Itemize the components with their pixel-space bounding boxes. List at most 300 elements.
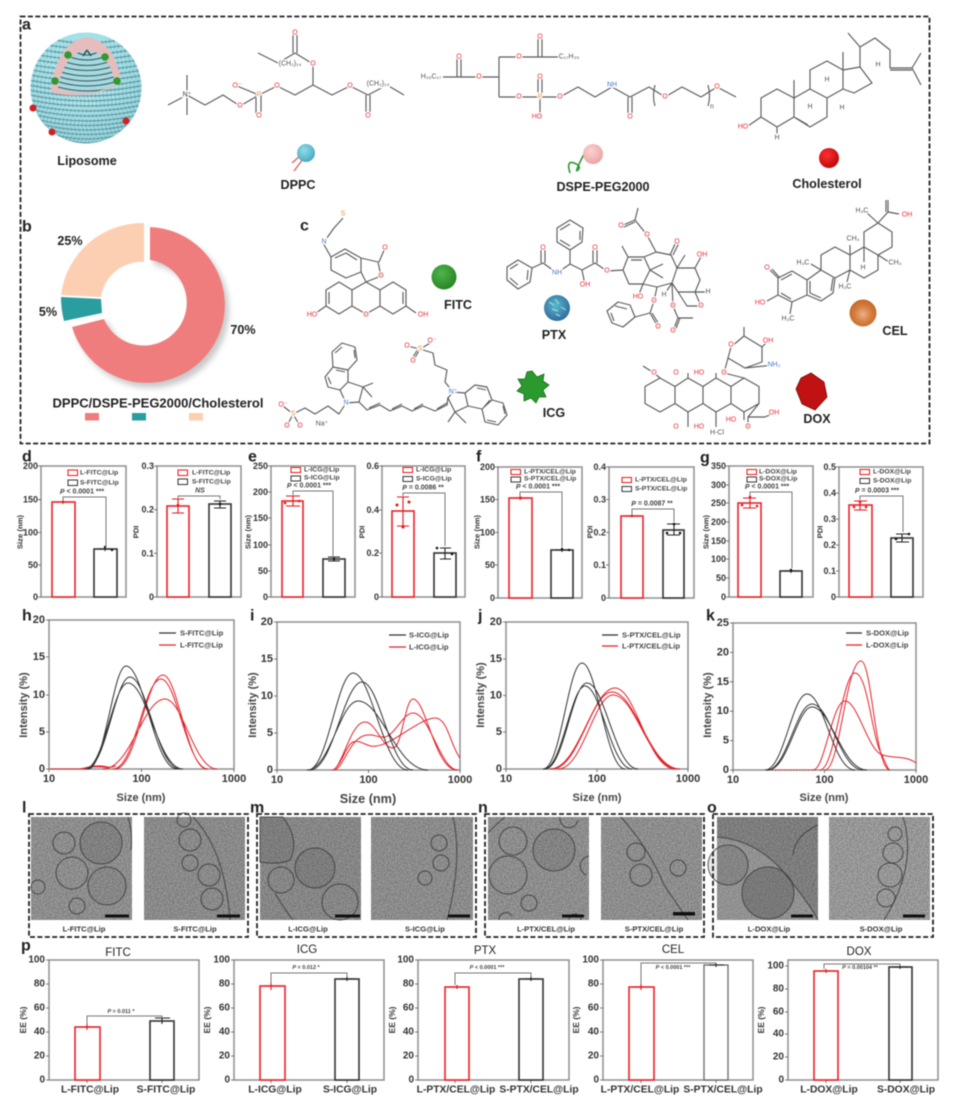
structure: DPPC: O (274, 82, 280, 90)
bar chart: ICG size: 250 (253, 461, 268, 471)
bar chart: ICG EE: 100 (213, 954, 230, 966)
structure: Cholesterol: H (824, 76, 830, 84)
structure: PTX: O (651, 298, 657, 304)
bar chart: ICG EE: 40 (219, 1026, 230, 1038)
structure: ICG: O (297, 422, 303, 430)
label: DPPC: DPPC (280, 178, 316, 192)
bar chart: ICG PDI: 0.2 (366, 548, 379, 558)
bar chart: PTX/CEL size: 100 (480, 528, 495, 538)
bar chart: PTX/CEL PDI: L-PTX/CEL@Lip (635, 476, 687, 484)
bar chart: DOX size: 200 (711, 517, 726, 527)
panel k: DOX size distribution: 0 (723, 764, 729, 776)
icon: ICG ball (517, 371, 549, 403)
legend title: DPPC/DSPE-PEG2000/Cholesterol (53, 396, 263, 410)
bar chart: DOX PDI: 0 (831, 592, 836, 602)
bar chart: CEL EE: P < 0.0001 *** (656, 965, 691, 971)
structure: FITC: O (378, 272, 384, 280)
label: DOX: DOX (803, 412, 831, 426)
bar chart: PTX/CEL PDI: S-PTX/CEL@Lip (635, 486, 687, 492)
structure: Cholesterol: H (807, 104, 813, 110)
panel k: DOX size distribution (702, 608, 928, 804)
structure: DOX: O (745, 424, 751, 430)
micrograph: L-FITC@Lip (31, 817, 132, 920)
bar chart: ICG EE: EE (%) (202, 1006, 212, 1033)
panel f: PTX/CEL size and PDI bars (472, 448, 694, 603)
legend: PTX/CEL distribution: L-PTX/CEL@Lip (622, 642, 680, 650)
bar chart: PTX/CEL PDI: 0.1 (593, 560, 606, 570)
panel i: ICG size distribution: 15 (261, 653, 273, 665)
panel j: PTX/CEL size distribution: 10 (500, 773, 512, 785)
donut segment: DPPC 70% (72, 227, 225, 383)
structure: CEL: H (860, 264, 866, 272)
structure: PTX (507, 208, 711, 334)
bar chart: FITC size: 200 (23, 461, 38, 471)
panel j: PTX/CEL size distribution: 5 (496, 726, 502, 738)
bar chart: FITC PDI: S-FITC@Lip (192, 478, 231, 486)
bar chart: CEL EE (571, 944, 763, 1096)
panel k: DOX size distribution: 5 (723, 735, 729, 747)
structure: Cholesterol: H (774, 134, 780, 142)
bar chart: ICG size: L-ICG@Lip (304, 466, 339, 474)
bar chart: PTX/CEL PDI: 0.2 (593, 528, 606, 538)
structure: PTX: OH (580, 282, 590, 288)
panel h: FITC size distribution (18, 608, 246, 804)
panel k: DOX size distribution: 100 (815, 774, 834, 786)
structure: FITC: OH (418, 312, 428, 318)
bar chart: FITC size: 50 (28, 560, 38, 570)
structure: FITC: HO (307, 312, 318, 318)
bar chart: DOX EE: 100 (767, 960, 784, 972)
panel label i: i (250, 608, 254, 624)
micrograph: L-DOX@Lip (708, 817, 818, 920)
structure: PTX: O (670, 302, 676, 310)
bar chart: FITC EE: P = 0.011 * (107, 1009, 135, 1015)
panel label o: o (707, 800, 717, 816)
panel m: ICG cryo-TEM (250, 800, 476, 937)
structure: DSPE-PEG2000: O (476, 74, 482, 80)
bar chart: DOX PDI: PDI (816, 526, 824, 538)
bar chart: DOX size: 350 (711, 461, 726, 471)
structure: Cholesterol: H (839, 104, 845, 112)
bar chart: DOX size: Size (nm) (702, 514, 710, 549)
structure: DPPC (168, 30, 404, 120)
micrograph: S-PTX/CEL@Lip (601, 817, 702, 920)
panel o: DOX cryo-TEM (707, 800, 933, 937)
bar chart: FITC EE (18, 947, 199, 1096)
structure: CEL: CH₃ (889, 260, 902, 266)
structure: CEL: O (764, 264, 770, 272)
bar chart: FITC PDI (132, 461, 241, 602)
panel n: PTX/CEL cryo-TEM (478, 800, 704, 937)
structure: DOX: O (673, 370, 679, 376)
bar chart: DOX PDI: 0.1 (823, 566, 836, 576)
bar chart: CEL EE: 100 (582, 954, 599, 966)
structure: PTX: O (540, 244, 546, 252)
micrograph: S-FITC@Lip (144, 813, 245, 920)
structure: DOX: O (728, 342, 734, 348)
legend: ICG distribution: S-ICG@Lip (409, 630, 449, 640)
structure: DPPC: P (257, 92, 262, 98)
panel j: PTX/CEL size distribution: Intensity (%) (475, 662, 487, 728)
bar chart: DOX size (702, 461, 813, 602)
bar chart: PTX/CEL PDI: 0.4 (593, 462, 606, 472)
panel e: ICG size and PDI bars (244, 448, 465, 602)
bar chart: DOX EE (756, 946, 938, 1096)
label: Liposome: Liposome (57, 154, 117, 168)
icon: CEL ball (850, 300, 876, 326)
structure: ICG: N (343, 400, 349, 406)
bar chart: PTX/CEL PDI: 0.3 (593, 494, 606, 504)
structure: DSPE-PEG2000 (421, 34, 736, 120)
label: ICG: ICG (543, 406, 565, 420)
panel k: DOX size distribution: Size (nm) (800, 792, 849, 804)
panel h: FITC size distribution: 10 (43, 773, 55, 785)
panel label h: h (22, 608, 32, 624)
bar chart: CEL EE: CEL (662, 944, 685, 956)
structure: DPPC: O (347, 82, 353, 90)
structure: DSPE-PEG2000: O (516, 94, 522, 100)
structure: PTX: O (698, 302, 704, 310)
panel i: ICG size distribution: 5 (267, 727, 273, 739)
label: DSPE-PEG2000: DSPE-PEG2000 (556, 180, 650, 194)
structure: DPPC: O (365, 112, 371, 120)
panel label c: c (300, 218, 309, 234)
structure: DSPE-PEG2000: n (710, 104, 714, 110)
panel h: FITC size distribution: 100 (132, 773, 151, 785)
structure: DSPE-PEG2000: NH (607, 82, 617, 88)
panel label e: e (248, 448, 257, 466)
panel h: FITC size distribution: 5 (39, 726, 45, 738)
bar chart: FITC PDI: 0.3 (141, 461, 154, 471)
bar chart: CEL EE: 20 (588, 1050, 599, 1062)
panel l: FITC cryo-TEM (22, 800, 248, 937)
structure: PTX: O (618, 222, 624, 230)
bar chart: ICG PDI: L-ICG@Lip (416, 466, 451, 474)
panel k: DOX size distribution: 25 (717, 617, 729, 629)
panel h: FITC size distribution: Intensity (%) (18, 672, 30, 738)
structure: CEL: CH₃ (847, 236, 860, 242)
structure: FITC: O (382, 244, 388, 252)
bar chart: ICG EE: L-ICG@Lip (248, 1084, 302, 1096)
structure: PTX: H (705, 288, 711, 296)
bar chart: ICG size: Size (nm) (244, 514, 252, 549)
structure: DPPC: O (256, 112, 262, 120)
structure: PTX: O (670, 328, 676, 334)
structure: CEL (755, 200, 912, 322)
bar chart: DOX PDI: S-DOX@Lip (873, 478, 911, 484)
bar chart: PTX EE: P < 0.0001 *** (470, 965, 505, 971)
structure: ICG: S (291, 410, 296, 418)
panel label b: b (22, 218, 32, 236)
structure: DPPC: (CH₂)₁₄ (367, 80, 389, 88)
label: FITC: FITC (444, 298, 472, 312)
caption: L-ICG@Lip: L-ICG@Lip (288, 924, 328, 934)
structure: DSPE-PEG2000: H₃₅C₁₇ (421, 74, 442, 80)
bar chart: FITC size: L-FITC@Lip (80, 470, 118, 476)
bar chart: CEL EE: 60 (588, 1002, 599, 1014)
structure: ICG: O (404, 342, 410, 350)
bar chart: DOX size: 50 (716, 573, 726, 583)
bar chart: CEL EE: EE (%) (571, 1006, 581, 1033)
bar chart: ICG PDI: 0.4 (366, 505, 379, 515)
donut chart: lipid ratio (61, 223, 229, 388)
bar chart: DOX size: S-DOX@Lip (759, 476, 797, 482)
bar chart: PTX/CEL PDI: P = 0.0087 ** (631, 500, 673, 508)
structure: ICG: N⁺ (449, 388, 458, 396)
structure: DSPE-PEG2000: O (537, 74, 543, 80)
bar chart: ICG PDI: P = 0.0086 ** (402, 484, 444, 492)
structure: PTX: NH (552, 270, 562, 276)
icon: FITC ball (432, 264, 456, 290)
legend: DOX distribution (846, 628, 909, 650)
bar chart: DOX PDI: 0.5 (823, 462, 836, 472)
structure: DOX: NH₂ (768, 362, 781, 368)
bar chart: PTX EE: 80 (403, 978, 414, 990)
panel k: DOX size distribution: Intensity (%) (702, 672, 714, 738)
bar chart: ICG EE: ICG (297, 944, 317, 956)
label: 70%: 70% (230, 323, 256, 337)
structure: DSPE-PEG2000: O (662, 94, 668, 100)
bar chart: ICG PDI: S-ICG@Lip (416, 476, 452, 482)
caption: L-DOX@Lip: L-DOX@Lip (748, 924, 791, 934)
bar chart: PTX EE: 40 (403, 1026, 414, 1038)
structure: ICG: Na⁺ (316, 420, 329, 428)
structure: DOX: OH (763, 338, 773, 344)
bar chart: PTX/CEL PDI (586, 462, 694, 603)
bar chart: DOX EE: DOX (847, 946, 872, 958)
panel label m: m (250, 800, 264, 816)
structure: ICG: O⁻ (427, 338, 437, 344)
micrograph: L-ICG@Lip (260, 817, 361, 920)
structure: ICG: O⁻ (278, 402, 288, 408)
bar chart: ICG PDI: PDI (358, 526, 366, 538)
bar chart: DOX EE: EE (%) (756, 1006, 766, 1033)
structure: DOX: OH (769, 410, 779, 416)
panel h: FITC size distribution: 20 (33, 614, 45, 626)
bar chart: DOX EE: 60 (773, 1006, 784, 1018)
caption: S-FITC@Lip: S-FITC@Lip (173, 924, 217, 934)
panel: liposome composition (a, b, c) (20, 16, 930, 444)
structure: DSPE-PEG2000: P (538, 94, 543, 100)
structure: PTX: H (661, 292, 667, 298)
bar chart: DOX PDI: 0.3 (823, 514, 836, 524)
panel j: PTX/CEL size distribution: Size (nm) (573, 792, 622, 804)
panel j: PTX/CEL size distribution: 20 (490, 616, 502, 628)
panel i: ICG size distribution: Intensity (%) (247, 672, 259, 738)
structure: Cholesterol: HO (738, 124, 749, 130)
bar chart: ICG PDI (358, 461, 465, 602)
label: PTX: PTX (542, 328, 567, 342)
structure: DOX (643, 327, 781, 436)
label: 25%: 25% (57, 234, 83, 248)
structure: DSPE-PEG2000: O (714, 84, 720, 90)
legend: FITC distribution (159, 628, 224, 650)
structure: ICG (278, 338, 507, 430)
bar chart: DOX size: 0 (721, 592, 726, 602)
caption: S-PTX/CEL@Lip: S-PTX/CEL@Lip (625, 924, 684, 934)
bar chart: FITC size: 0 (33, 592, 38, 602)
panel label j: j (477, 608, 482, 624)
structure: CEL: H₃C (856, 208, 868, 214)
bar chart: ICG EE: S-ICG@Lip (323, 1084, 377, 1096)
bar chart: ICG EE: P = 0.012 * (292, 965, 321, 971)
icon: PTX ball (544, 295, 570, 321)
structure: DOX: HO (694, 424, 705, 430)
bar chart: ICG PDI: 0 (374, 592, 379, 602)
bar chart: FITC EE: S-FITC@Lip (137, 1084, 195, 1096)
structure: DSPE-PEG2000: O (456, 54, 462, 60)
panel h: FITC size distribution: 1000 (222, 773, 246, 785)
bar chart: FITC EE: 100 (28, 954, 45, 966)
panel i: ICG size distribution: 10 (261, 690, 273, 702)
legend: PTX/CEL distribution: S-PTX/CEL@Lip (622, 630, 681, 640)
structure: CEL: HO (755, 300, 766, 306)
bar chart: FITC size: 150 (23, 495, 38, 505)
bar chart: DOX EE: L-DOX@Lip (800, 1084, 858, 1096)
structure: DOX: HO (694, 370, 705, 376)
bar chart: PTX EE: S-PTX/CEL@Lip (499, 1084, 579, 1096)
bar chart: ICG size: 200 (253, 487, 268, 497)
micrograph: S-ICG@Lip (371, 817, 473, 920)
bar chart: ICG size: 100 (253, 540, 268, 550)
structure: DOX: O (651, 370, 657, 376)
bar chart: DOX size: P < 0.0001 *** (745, 484, 789, 490)
panel label f: f (476, 448, 482, 466)
structure: PTX: O (604, 268, 610, 274)
bar chart: DOX size: 250 (711, 498, 726, 508)
bar chart: ICG size: S-ICG@Lip (304, 474, 340, 482)
panel i: ICG size distribution: 10 (271, 774, 283, 786)
structure: CEL: H₃C (782, 316, 794, 322)
structure: DPPC: O⁻ (232, 82, 242, 90)
structure: CEL: H₃C (839, 284, 851, 290)
panel label d: d (22, 448, 32, 466)
panel j: PTX/CEL size distribution: 100 (588, 773, 606, 785)
structure: ICG: O (284, 422, 290, 430)
panel label k: k (706, 608, 715, 624)
bar chart: FITC EE: 40 (34, 1026, 45, 1038)
bar chart: FITC size: 100 (23, 528, 38, 538)
bar chart: ICG size: P < 0.0001 *** (287, 482, 331, 490)
structure: FITC: S (341, 210, 346, 218)
structure: Cholesterol: H (875, 62, 881, 68)
panel label g: g (700, 450, 710, 466)
structure: DOX: O (673, 424, 679, 430)
bar chart: PTX/CEL size: L-PTX/CEL@Lip (524, 468, 576, 476)
bar chart: DOX PDI: L-DOX@Lip (873, 468, 911, 476)
label: CEL: CEL (882, 324, 908, 338)
bar chart: PTX EE: 60 (403, 1002, 414, 1014)
bar chart: ICG EE: 60 (219, 1002, 230, 1014)
panel k: DOX size distribution: 15 (717, 676, 729, 688)
bar chart: FITC EE: EE (%) (18, 1006, 28, 1033)
bar chart: PTX EE: PTX (474, 945, 497, 957)
micrograph: S-DOX@Lip (829, 817, 930, 920)
panel k: DOX size distribution: 20 (717, 646, 729, 658)
label: Cholesterol: Cholesterol (792, 177, 862, 191)
bar chart: ICG size (244, 461, 355, 602)
bar chart: PTX/CEL PDI: PDI (586, 526, 594, 538)
structure: DPPC: N⁺ (183, 92, 192, 98)
bar chart: PTX/CEL size: P < 0.0001 *** (516, 484, 560, 490)
bar chart: DOX PDI: 0.4 (823, 488, 836, 498)
bar chart: PTX EE: 100 (397, 954, 414, 966)
bar chart: DOX EE: S-DOX@Lip (877, 1084, 935, 1096)
bar chart: DOX size: 150 (711, 536, 726, 546)
structure: PTX: O (592, 244, 598, 252)
bar chart: PTX EE: 20 (403, 1050, 414, 1062)
structure: CEL: H₃C (797, 260, 809, 266)
panel j: PTX/CEL size distribution: 0 (496, 763, 502, 775)
bar chart: ICG size: 0 (263, 592, 268, 602)
bar chart: FITC PDI: 0.2 (141, 505, 154, 515)
panel label p: p (21, 938, 31, 954)
panel g: DOX size and PDI bars (700, 450, 923, 602)
bar chart: DOX EE: 0 (778, 1074, 784, 1086)
bar chart: PTX EE: 0 (408, 1074, 414, 1086)
bar chart: FITC EE: 80 (34, 978, 45, 990)
bar chart: PTX/CEL size: 200 (480, 462, 495, 472)
donut segment: DSPE-PEG2000 5% (61, 297, 102, 321)
legend: DOX distribution: S-DOX@Lip (866, 628, 909, 638)
icon: DOX ball (796, 373, 827, 410)
structure: FITC (307, 210, 428, 318)
panel k: DOX size distribution: 10 (717, 705, 729, 717)
icon: cholesterol ball (819, 148, 839, 168)
bar chart: DOX EE: P = 0.00104 ** (842, 965, 879, 971)
panel label n: n (478, 800, 488, 816)
legend: ICG distribution: L-ICG@Lip (409, 642, 449, 652)
bar chart: DOX PDI (816, 462, 923, 602)
structure: ICG: S (418, 346, 423, 352)
bar chart: FITC size: Size (nm) (16, 514, 24, 549)
bar chart: ICG EE (202, 944, 384, 1096)
panel j: PTX/CEL size distribution (475, 608, 700, 804)
bar chart: PTX EE: L-PTX/CEL@Lip (417, 1084, 495, 1096)
structure: DOX: HO (726, 416, 737, 424)
bar chart: FITC PDI: 0 (149, 592, 154, 602)
bar chart: DOX EE: 40 (773, 1028, 784, 1040)
panel h: FITC size distribution: 10 (33, 689, 45, 701)
panel label a: a (22, 16, 31, 34)
panel h: FITC size distribution: Size (nm) (117, 792, 166, 804)
legend: ICG distribution (389, 630, 449, 652)
structure: FITC: O (363, 312, 369, 318)
bar chart: PTX/CEL PDI: 0 (601, 593, 606, 603)
bar chart: PTX/CEL size: 50 (485, 560, 495, 570)
bar chart: PTX/CEL size: 0 (490, 593, 495, 603)
panel i: ICG size distribution: 20 (261, 616, 273, 628)
structure: DPPC: O (237, 102, 243, 110)
bar chart: PTX/CEL size: Size (nm) (472, 514, 482, 549)
structure: FITC: N (321, 238, 327, 246)
bar chart: DOX size: 100 (711, 554, 726, 564)
bar chart: CEL EE: S-PTX/CEL@Lip (683, 1084, 763, 1096)
bar chart: FITC size: S-FITC@Lip (80, 480, 119, 486)
panel k: DOX size distribution: 1000 (904, 774, 928, 786)
structure: DSPE-PEG2000: O (516, 54, 522, 60)
bar chart: DOX EE: 20 (773, 1052, 784, 1062)
structure: DSPE-PEG2000: C₁₇H₃₅ (559, 54, 579, 60)
bar chart: PTX/CEL size: 150 (480, 494, 495, 504)
bar chart: CEL EE: 0 (593, 1074, 599, 1086)
panel j: PTX/CEL size distribution: 1000 (676, 773, 700, 785)
bar chart: FITC EE: 0 (39, 1074, 45, 1086)
structure: Cholesterol (738, 33, 921, 142)
icon: DSPE-PEG2000 lipid (569, 144, 603, 173)
caption: S-ICG@Lip: S-ICG@Lip (405, 924, 445, 934)
structure: PTX: O (644, 232, 650, 238)
